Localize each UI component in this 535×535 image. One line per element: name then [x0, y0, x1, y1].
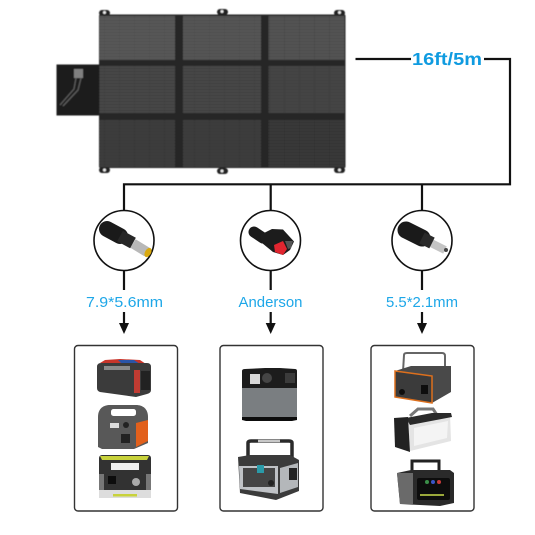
power station: handle and grey trim [238, 441, 299, 500]
arrow down [417, 323, 427, 334]
connector column: 5.5*2.1mm [386, 210, 458, 334]
power station: rugged dark [397, 461, 454, 506]
arrow down [119, 323, 129, 334]
device box 2 [220, 346, 323, 511]
arrow down [266, 323, 276, 334]
cable length label: 16ft/5m [412, 49, 482, 69]
panel mounting eyelets [99, 9, 345, 174]
device box 3 [371, 346, 474, 511]
solar panel [56, 9, 346, 174]
power station: orange side [98, 405, 148, 449]
connector circle with barrel plug [94, 210, 154, 270]
power station: yellow green trim [99, 455, 151, 498]
connector circle with Anderson plug [240, 210, 300, 270]
power station: grey cube [242, 368, 297, 421]
power station: orange frame [395, 353, 451, 403]
connector column: Anderson [238, 210, 302, 334]
power station: red and black [97, 359, 151, 397]
connector circle with barrel plug [392, 210, 452, 270]
connector label: Anderson [238, 294, 302, 311]
power station: silver case [394, 409, 452, 452]
panel backing [99, 14, 346, 168]
solar cell grid [100, 16, 344, 167]
connector label: 5.5*2.1mm [386, 294, 458, 311]
storage pouch flap [56, 64, 100, 116]
connector column: 7.9*5.6mm [86, 210, 163, 334]
connector label: 7.9*5.6mm [86, 294, 163, 311]
cable with length label [124, 49, 510, 211]
device box 1 [74, 346, 178, 511]
